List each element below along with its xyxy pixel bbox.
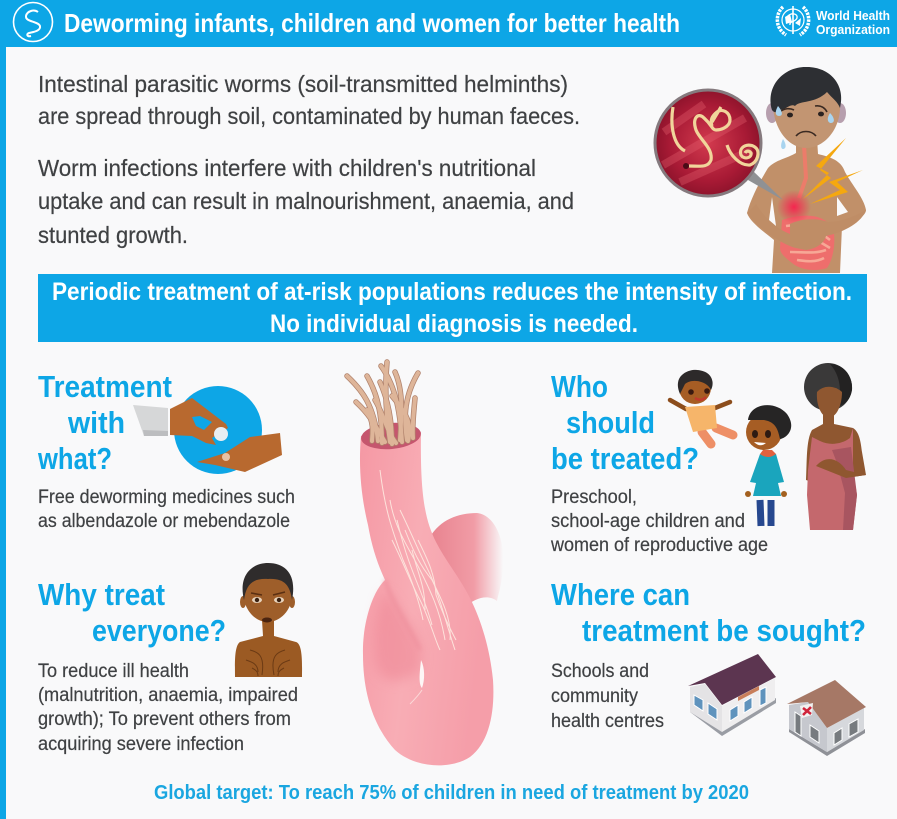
body text bbox=[38, 661, 298, 755]
lower loop shading bbox=[374, 590, 421, 681]
veins bbox=[380, 470, 456, 650]
head bbox=[773, 86, 840, 148]
icon: child bbox=[745, 405, 791, 526]
panel: why treat everyone bbox=[38, 563, 302, 755]
crossing edge bbox=[385, 580, 420, 650]
magnifier with worms bbox=[655, 90, 761, 196]
heading bbox=[38, 577, 226, 648]
banner: No individual diagnosis is needed. bbox=[270, 310, 638, 338]
worm strands bbox=[347, 362, 418, 444]
body bbox=[747, 138, 866, 273]
body text: school-age children and bbox=[551, 511, 745, 532]
illustration: sick boy with worm magnifier bbox=[655, 67, 866, 273]
tears bbox=[776, 106, 834, 149]
WHO wordmark: World Health bbox=[816, 9, 890, 23]
body text bbox=[551, 661, 664, 732]
body text: Free deworming medicines such bbox=[38, 487, 295, 508]
intro text: are spread through soil, contaminated by human faeces. bbox=[38, 103, 580, 129]
panel: who should be treated bbox=[550, 363, 866, 556]
body text: acquiring severe infection bbox=[38, 734, 244, 755]
heading: should bbox=[566, 405, 655, 440]
body text: growth); To prevent others from bbox=[38, 709, 291, 730]
panel: treatment with what bbox=[37, 369, 295, 532]
heading: what? bbox=[37, 441, 112, 476]
intro text bbox=[38, 71, 580, 248]
body text: Preschool, bbox=[551, 487, 637, 508]
heading: be treated? bbox=[551, 441, 699, 476]
global target: Global target: To reach 75% of children in need of treatment by 2020 bbox=[154, 782, 749, 804]
ears bbox=[766, 103, 778, 123]
tube opening bbox=[360, 420, 422, 452]
magnifier pointer bbox=[748, 170, 783, 200]
panel: where can treatment be sought bbox=[551, 577, 866, 756]
icon: WHO emblem bbox=[777, 6, 809, 35]
body text: women of reproductive age bbox=[550, 535, 768, 556]
body text: as albendazole or mebendazole bbox=[38, 511, 290, 532]
intro text: uptake and can result in malnourishment, anaemia, and bbox=[38, 188, 574, 214]
icon: worm logo bbox=[14, 2, 52, 42]
heading: Where can bbox=[551, 577, 690, 612]
body text: community bbox=[551, 686, 638, 707]
banner bbox=[38, 274, 867, 342]
heading: treatment be sought? bbox=[582, 613, 866, 648]
crease bbox=[410, 690, 422, 704]
heading bbox=[551, 369, 699, 476]
heading bbox=[551, 577, 866, 648]
face bbox=[780, 106, 827, 112]
icon: school building bbox=[688, 654, 776, 736]
heading: Who bbox=[551, 369, 608, 404]
intestines bbox=[780, 216, 834, 270]
left border bbox=[0, 0, 6, 819]
body text: (malnutrition, anaemia, impaired bbox=[38, 685, 298, 706]
illustration: intestine with worms bbox=[347, 362, 503, 765]
heading: everyone? bbox=[92, 613, 226, 648]
intro text: Intestinal parasitic worms (soil-transmitted helminths) bbox=[38, 71, 568, 97]
oesophagus bbox=[799, 145, 806, 198]
tube bbox=[360, 432, 493, 765]
icon: hands giving a pill bbox=[133, 386, 282, 474]
heading: Why treat bbox=[38, 577, 165, 612]
back loop bbox=[430, 513, 503, 607]
icon: pregnant woman bbox=[804, 363, 866, 530]
icon: health centre bbox=[787, 680, 866, 756]
heading: Treatment bbox=[38, 369, 172, 404]
icon: baby bbox=[670, 370, 733, 444]
lightning bolts bbox=[803, 138, 863, 204]
hole bbox=[420, 660, 424, 688]
icon: malnourished person bbox=[235, 563, 302, 677]
WHO wordmark bbox=[816, 9, 890, 37]
body text bbox=[38, 487, 295, 532]
body text: health centres bbox=[551, 711, 664, 732]
intro text: stunted growth. bbox=[38, 222, 188, 248]
intro text: Worm infections interfere with children's nutritional bbox=[38, 155, 536, 181]
hair bbox=[771, 67, 841, 112]
heading: with bbox=[67, 405, 125, 440]
header bar bbox=[0, 0, 897, 47]
WHO wordmark: Organization bbox=[816, 23, 890, 37]
title: Deworming infants, children and women for better health bbox=[64, 8, 680, 38]
gaps by the arms bbox=[769, 197, 848, 226]
body text: Schools and bbox=[551, 661, 649, 682]
body text: To reduce ill health bbox=[38, 661, 189, 682]
body text bbox=[550, 487, 768, 556]
arms and hands bbox=[747, 204, 866, 250]
pain glow bbox=[777, 190, 811, 224]
heading bbox=[37, 369, 172, 476]
